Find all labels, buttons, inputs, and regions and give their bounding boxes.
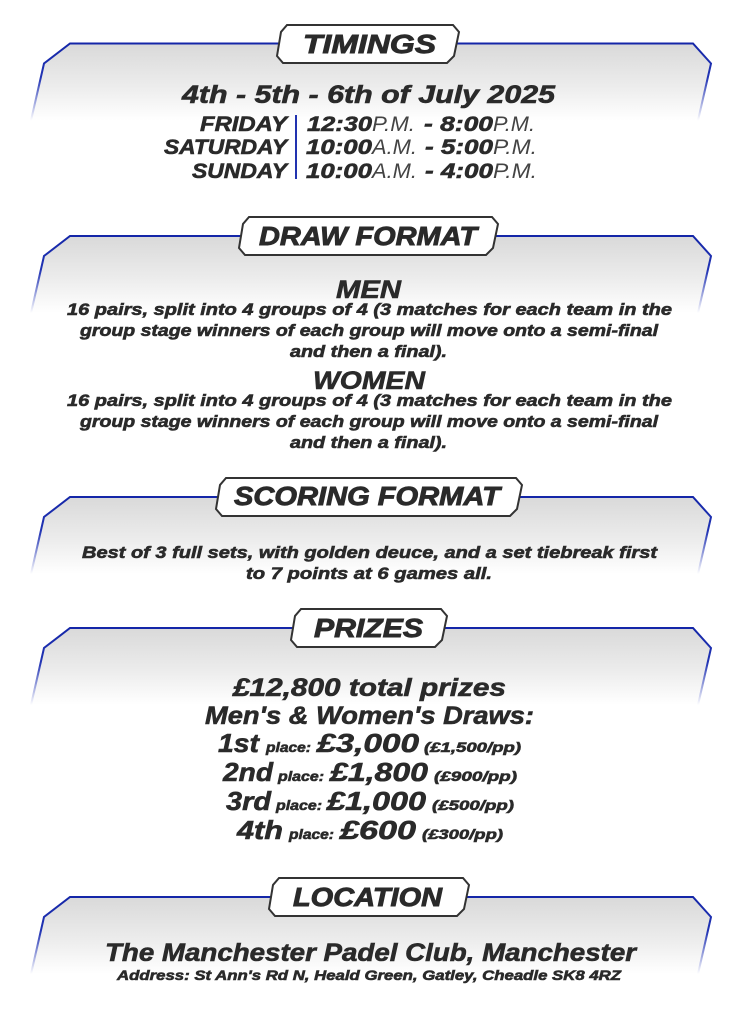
- women heading: WOMEN: [313, 367, 426, 395]
- scoring description: to 7 points at 6 games all.: [246, 565, 492, 583]
- schedule times: - 4:00: [425, 160, 493, 183]
- panel: location: [31, 897, 711, 974]
- schedule times: 10:00: [306, 160, 372, 183]
- prize: 4th place: 4th: [236, 815, 283, 845]
- prize: 3rd place: 3rd: [226, 786, 272, 816]
- heading tab: draw format: DRAW FORMAT: [259, 221, 479, 251]
- prize: 2nd place: (£900/pp): [434, 768, 517, 784]
- heading tab: timings: [277, 25, 459, 63]
- panel: timings: [31, 44, 711, 120]
- men description: and then a final).: [290, 343, 447, 361]
- prize: 4th place: £600: [339, 815, 417, 845]
- venue address: Address: St Ann's Rd N, Heald Green, Gatley, Cheadle SK8 4RZ: [116, 967, 622, 983]
- date line: 4th - 5th - 6th of July 2025: [181, 81, 556, 109]
- women description: 16 pairs, split into 4 groups of 4 (3 matches for each team in the: [67, 392, 672, 410]
- men description: group stage winners of each group will move onto a semi-final: [79, 322, 658, 340]
- prize: 4th place: [236, 815, 503, 845]
- heading tab: location: LOCATION: [293, 882, 443, 912]
- prize: 2nd place: place:: [277, 768, 324, 784]
- women description: group stage winners of each group will move onto a semi-final: [79, 413, 658, 431]
- schedule times: 12:30: [307, 113, 372, 136]
- schedule times: [306, 113, 537, 183]
- schedule days: SUNDAY: [192, 160, 289, 183]
- women description: [67, 392, 672, 452]
- panel: prizes: [31, 628, 711, 705]
- heading tab: scoring format: SCORING FORMAT: [234, 481, 502, 511]
- heading tab: draw format: [239, 217, 498, 255]
- scoring description: Best of 3 full sets, with golden deuce, and a set tiebreak first: [82, 544, 659, 562]
- heading tab: prizes: [291, 609, 447, 647]
- prizes total: £12,800 total prizes: [232, 674, 506, 702]
- men heading: MEN: [336, 276, 402, 304]
- prize: 1st place: (£1,500/pp): [424, 739, 521, 755]
- schedule days: [164, 113, 289, 183]
- prize: 3rd place: place:: [275, 797, 322, 813]
- heading tab: scoring format: [216, 478, 522, 516]
- schedule days: SATURDAY: [164, 136, 289, 159]
- heading tab: location: [269, 878, 469, 916]
- schedule times: - 8:00: [424, 113, 493, 136]
- schedule days: FRIDAY: [200, 113, 289, 136]
- schedule divider: [295, 115, 297, 179]
- prize: 3rd place: £1,000: [326, 786, 427, 816]
- prize: 1st place: place:: [265, 739, 311, 755]
- women description: and then a final).: [290, 434, 447, 452]
- schedule times: P.M.: [493, 136, 537, 159]
- prize: 4th place: (£300/pp): [422, 826, 503, 842]
- schedule times: 10:00: [306, 136, 372, 159]
- schedule times: P.M.: [372, 113, 415, 136]
- prize: 2nd place: 2nd: [222, 757, 274, 787]
- schedule times: P.M.: [493, 160, 537, 183]
- prize: 2nd place: [222, 757, 517, 787]
- prize: 3rd place: (£500/pp): [432, 797, 514, 813]
- schedule: [164, 113, 537, 183]
- men description: [67, 301, 672, 361]
- schedule times: A.M.: [370, 160, 417, 183]
- prize: 1st place: 1st: [218, 728, 260, 758]
- prize: 2nd place: £1,800: [329, 757, 429, 787]
- prizes draws heading: Men's & Women's Draws:: [205, 702, 534, 730]
- panel: scoring format: [31, 497, 711, 574]
- schedule times: A.M.: [370, 136, 417, 159]
- scoring description: [82, 544, 659, 583]
- heading tab: timings: TIMINGS: [303, 29, 437, 59]
- men description: 16 pairs, split into 4 groups of 4 (3 matches for each team in the: [67, 301, 672, 319]
- heading tab: prizes: PRIZES: [314, 613, 424, 643]
- schedule times: P.M.: [493, 113, 535, 136]
- venue name: The Manchester Padel Club, Manchester: [105, 939, 637, 967]
- prize: 3rd place: [226, 786, 514, 816]
- schedule times: - 5:00: [425, 136, 493, 159]
- panel: draw format: [31, 236, 711, 313]
- prize: 1st place: [218, 728, 521, 758]
- prize: 4th place: place:: [288, 826, 334, 842]
- prize: 1st place: £3,000: [316, 728, 420, 758]
